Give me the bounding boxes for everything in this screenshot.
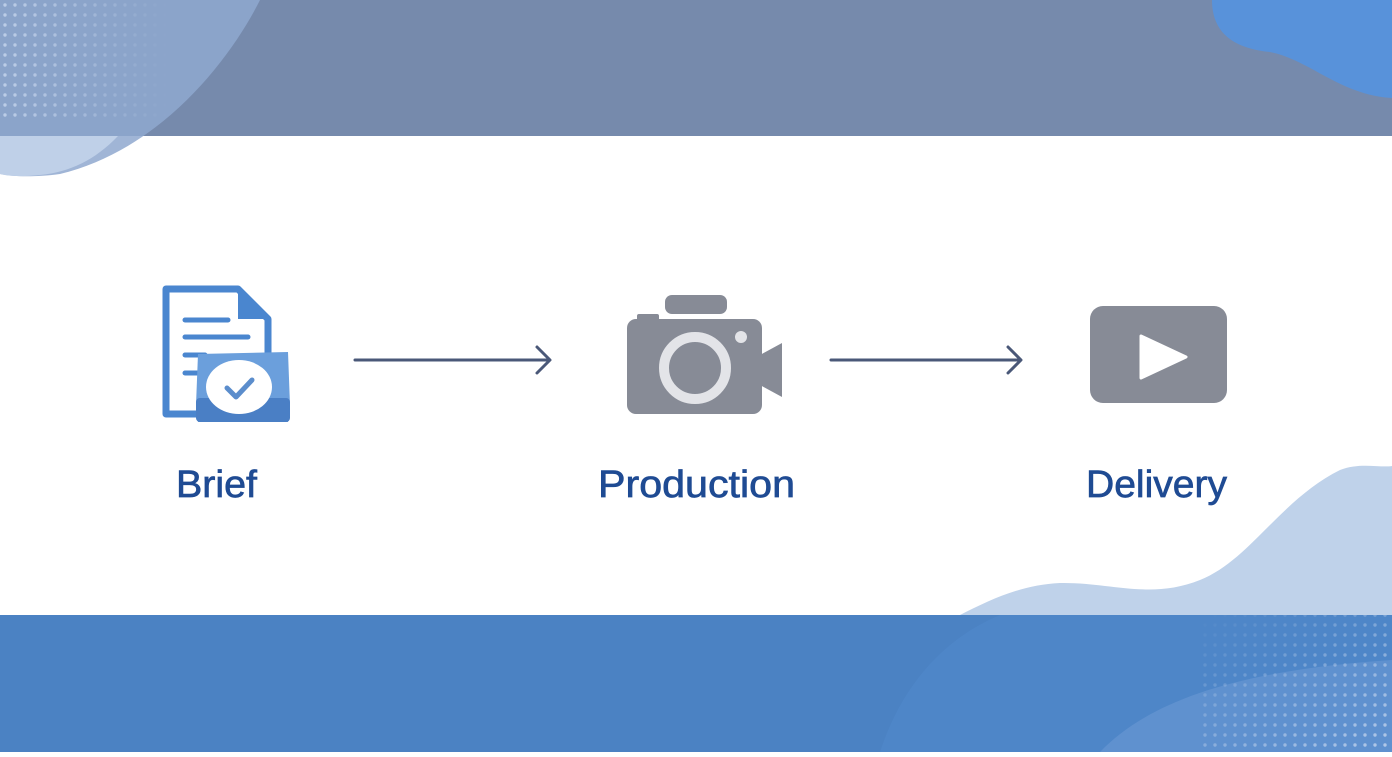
bottom band — [0, 466, 1392, 752]
arrow 1 — [355, 347, 550, 373]
arrow 2 — [831, 347, 1021, 373]
label: Production: Production — [598, 464, 795, 506]
label: Delivery: Delivery — [1086, 464, 1227, 506]
icon: camera — [627, 295, 782, 414]
icon: brief document with check — [166, 289, 290, 422]
top band — [0, 0, 1392, 176]
icon: play video — [1090, 306, 1227, 403]
label: Brief: Brief — [176, 464, 257, 506]
